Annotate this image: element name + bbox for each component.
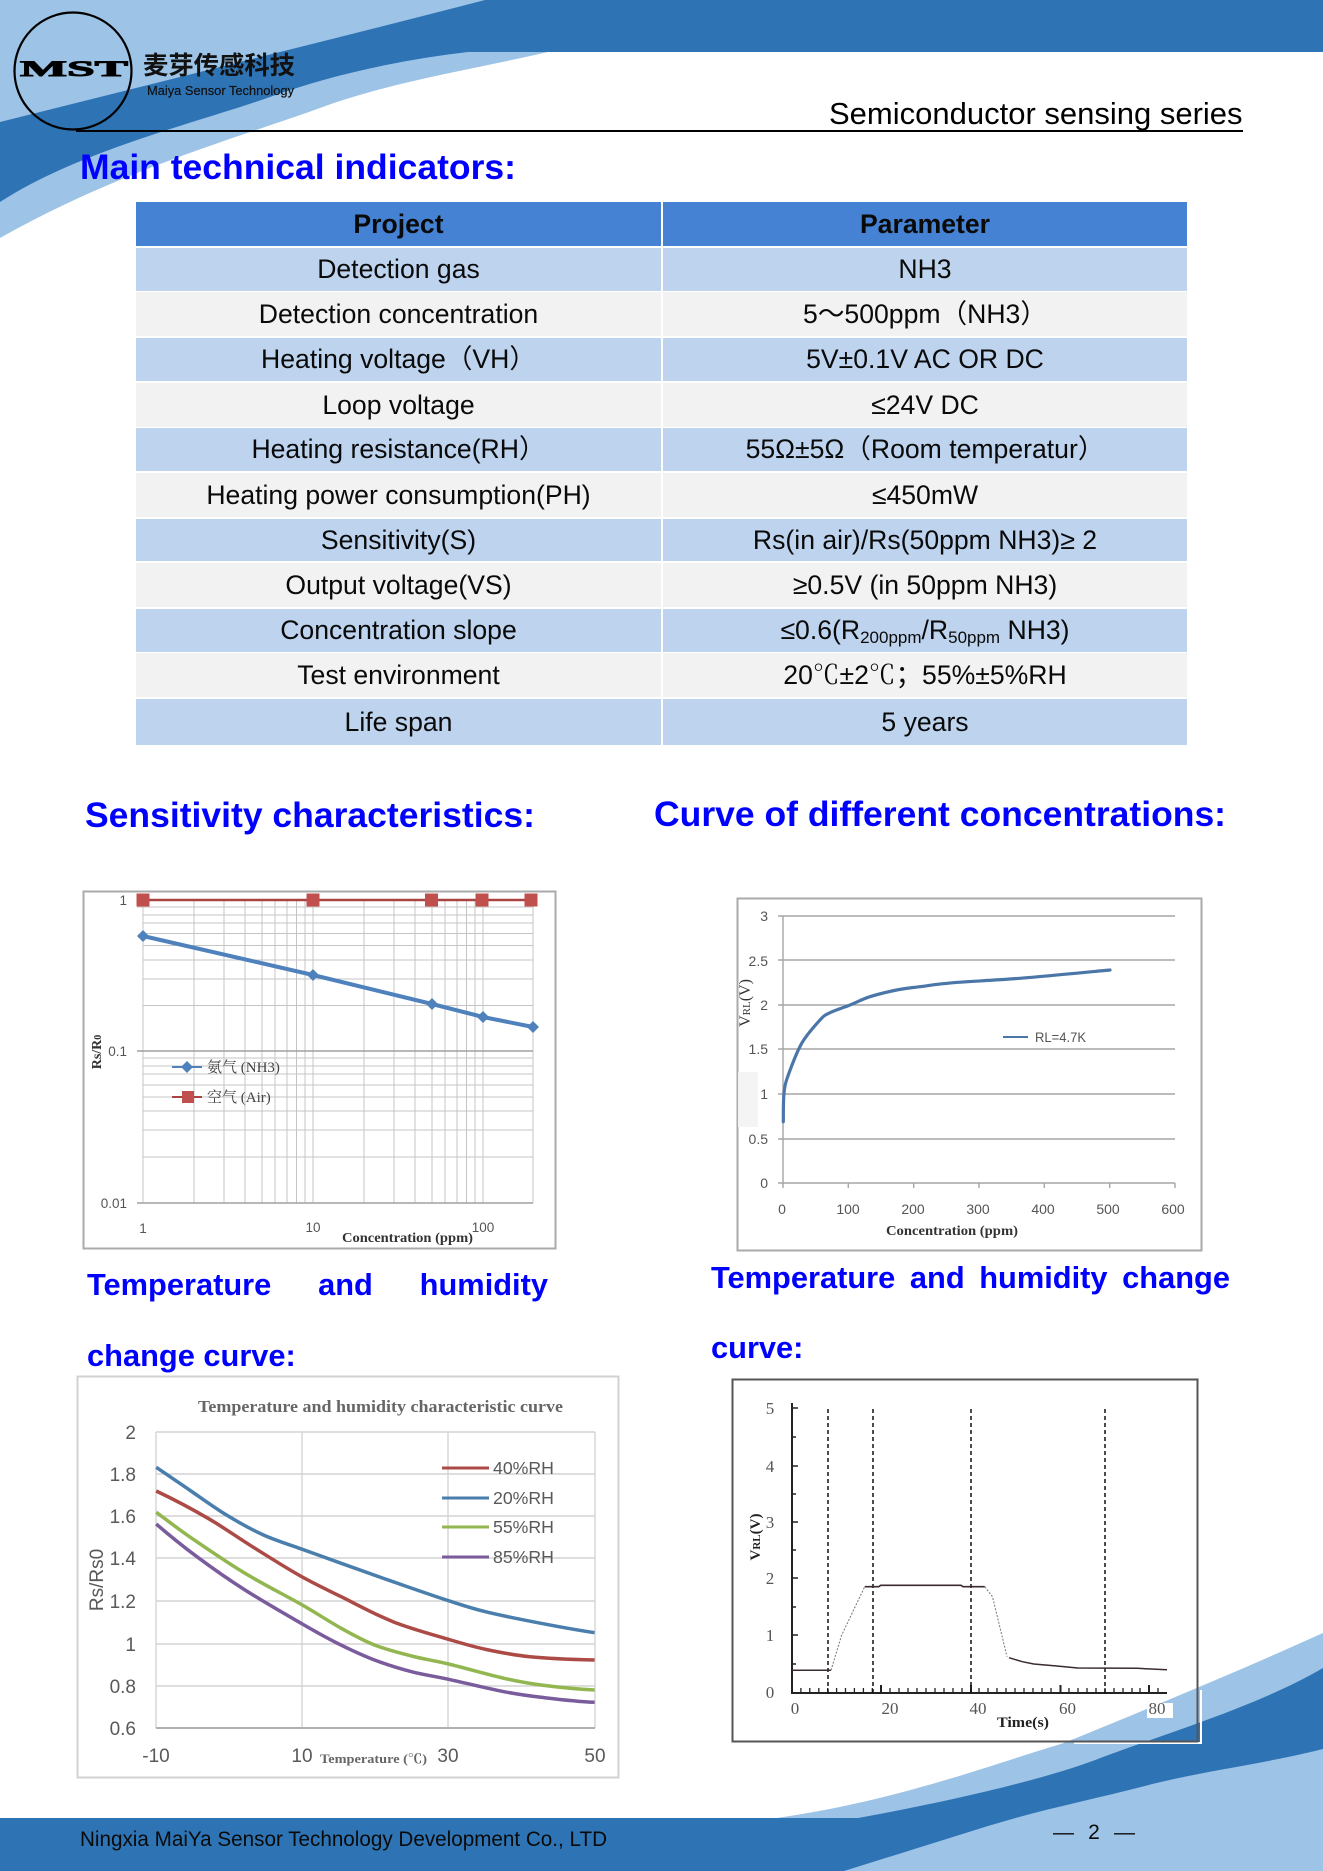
page number: — 2 —: [1053, 1821, 1135, 1844]
x tick labels: 200: [901, 1201, 925, 1217]
y axis title: VRL(V): [737, 979, 754, 1027]
row: detection gas: Detection gas: [317, 254, 480, 284]
y tick labels: [110, 1423, 136, 1740]
y tick labels: 2.5: [749, 953, 768, 969]
heading: temperature and humidity, left: [87, 1267, 548, 1373]
y tick labels: 0.5: [749, 1131, 768, 1147]
y tick labels: 1: [760, 1086, 768, 1102]
x axis title: Temperature (℃): [320, 1751, 427, 1766]
heading line two: curve:: [711, 1330, 803, 1365]
y tick labels: [749, 908, 768, 1191]
x tick labels: 30: [437, 1746, 459, 1767]
footer dark blue wave: [0, 1668, 1323, 1871]
grid and axes: [778, 916, 1175, 1188]
chart: sensitivity characteristics log-log: [82, 890, 556, 1250]
chart frame: [78, 1376, 618, 1778]
header rule: [76, 130, 1243, 132]
y tick labels: 5: [766, 1399, 774, 1418]
dashed time markers: [828, 1409, 1105, 1693]
grid: [156, 1432, 595, 1728]
y tick labels: 1: [766, 1626, 774, 1645]
x tick labels: 0: [791, 1699, 799, 1718]
table header row: Parameter: [860, 209, 990, 239]
x tick labels: -10: [142, 1746, 170, 1767]
legend: 55%RH: [493, 1517, 554, 1537]
axis tick labels: 1: [119, 893, 127, 908]
x tick labels: 80: [1148, 1699, 1166, 1718]
chart title: Temperature and humidity characteristic curve: [198, 1397, 563, 1416]
axis tick labels: 1: [139, 1221, 147, 1236]
y tick labels: 2: [760, 997, 768, 1013]
white patch behind label: [1147, 1703, 1173, 1718]
curve 55%RH: [156, 1512, 595, 1690]
row: sensitivity: [136, 519, 1187, 561]
row: heating voltage: Heating voltage（VH）: [261, 344, 536, 374]
heading: temperature and humidity, right: [711, 1260, 1230, 1365]
curve 20%RH: [156, 1467, 595, 1633]
header series title: Semiconductor sensing series: [829, 96, 1243, 131]
heading line two: change curve:: [87, 1338, 296, 1373]
y tick labels: 0: [766, 1683, 774, 1702]
row: heating power consumption: [136, 473, 1187, 517]
outer white edge: [1074, 1690, 1201, 1743]
axis tick labels: [101, 893, 494, 1236]
x tick labels: 40: [970, 1699, 986, 1718]
heading line one: Temperature and humidity: [87, 1267, 548, 1302]
row: heating voltage: 5V±0.1V AC OR DC: [806, 344, 1044, 374]
axis tick labels: 10: [305, 1220, 321, 1235]
x axis title: Time(s): [997, 1715, 1049, 1731]
y axis title: Rs/R0: [90, 1035, 105, 1069]
RL curve: [783, 970, 1110, 1122]
chart: temperature and humidity characteristic curve: [76, 1376, 620, 1778]
row: heating voltage: [136, 338, 1187, 381]
row: sensitivity: Rs(in air)/Rs(50ppm NH3)≥ 2: [753, 525, 1097, 555]
x tick labels: 20: [882, 1699, 898, 1718]
NH3 series: [137, 930, 539, 1033]
y axis title: Rs/Rs0: [87, 1549, 108, 1611]
y tick labels: 1.4: [110, 1549, 136, 1570]
row: detection gas: NH3: [898, 254, 952, 284]
row: concentration slope: Concentration slope: [280, 615, 517, 645]
row: loop voltage: [136, 383, 1187, 427]
y tick labels: 2: [125, 1423, 136, 1444]
legend: 空气 (Air): [207, 1088, 271, 1106]
x tick labels: 400: [1031, 1201, 1055, 1217]
y tick labels: 2: [766, 1569, 774, 1588]
y tick labels: 0.6: [110, 1719, 136, 1740]
y tick labels: 4: [766, 1457, 775, 1476]
logo Chinese company name: 麦芽传感科技: [143, 46, 295, 82]
heading: curve of different concentrations: Curve of different concentrations:: [654, 794, 1226, 834]
table header row: Project: [353, 209, 444, 239]
x axis title: Concentration (ppm): [342, 1231, 473, 1246]
y axis title: VRL(V): [748, 1514, 764, 1560]
row: sensitivity: Sensitivity(S): [321, 525, 476, 555]
row: life span: 5 years: [881, 707, 969, 737]
row: life span: Life span: [345, 707, 452, 737]
logo letters MST: MST: [20, 56, 129, 81]
row: concentration slope: [136, 609, 1187, 652]
row: test environment: 20℃±2℃；55%±5%RH: [783, 660, 1067, 690]
row: output voltage: Output voltage(VS): [285, 570, 512, 600]
curve 40%RH: [156, 1491, 595, 1660]
x tick labels: 10: [291, 1746, 313, 1767]
y tick labels: 1: [125, 1635, 136, 1656]
row: heating resistance: 55Ω±5Ω（Room temperatur）: [746, 434, 1104, 464]
chart frame: [738, 898, 1202, 1250]
chart: voltage versus concentration: [736, 898, 1202, 1252]
row: detection gas: [136, 248, 1187, 291]
x axis title: Concentration (ppm): [886, 1224, 1018, 1239]
y tick labels: 0.8: [110, 1677, 136, 1698]
x tick labels: 600: [1161, 1201, 1185, 1217]
legend: RL=4.7K: [1035, 1030, 1086, 1045]
x tick labels: 60: [1059, 1699, 1076, 1718]
row: heating resistance: Heating resistance(RH）: [251, 434, 546, 464]
y tick labels: 1.5: [749, 1041, 768, 1057]
response curve: [792, 1585, 1167, 1670]
legend: [1003, 1030, 1086, 1045]
y tick labels: 1.2: [110, 1592, 136, 1613]
x tick labels: 0: [778, 1201, 786, 1217]
axis tick labels: 0.01: [101, 1196, 127, 1211]
legend: 氨气 (NH3): [207, 1059, 280, 1076]
x tick labels: 500: [1096, 1201, 1120, 1217]
header dark blue wave: [0, 0, 1323, 202]
logo ring: [14, 12, 132, 130]
chart frame: [84, 892, 556, 1248]
row: heating power consumption: ≤450mW: [872, 480, 978, 510]
chart frame: [732, 1380, 1198, 1742]
row: loop voltage: Loop voltage: [322, 390, 475, 420]
row: life span: [136, 699, 1187, 745]
row: concentration slope: ≤0.6(R200ppm/R50ppm NH3): [780, 615, 1070, 647]
axis tick labels: 100: [472, 1220, 494, 1235]
legend: 40%RH: [493, 1458, 554, 1478]
row: heating resistance: [136, 428, 1187, 471]
table: technical parameters: [136, 202, 1187, 745]
y tick labels: 1.8: [110, 1465, 136, 1486]
x tick labels: [791, 1699, 1166, 1718]
grey patch: [738, 1072, 758, 1127]
row: output voltage: [136, 563, 1187, 607]
logo: MST circle with company name: [13, 11, 295, 131]
chart: response voltage over time: [732, 1378, 1202, 1744]
y tick labels: 0: [760, 1175, 768, 1191]
row: detection concentration: 5～500ppm（NH3）: [803, 299, 1047, 329]
x tick labels: 300: [966, 1201, 990, 1217]
x tick labels: 50: [584, 1746, 606, 1767]
air series: [136, 894, 538, 906]
row: output voltage: ≥0.5V (in 50ppm NH3): [793, 570, 1057, 600]
axis tick labels: 0.1: [108, 1044, 127, 1059]
row: test environment: [136, 653, 1187, 697]
header light blue wave: [0, 0, 1323, 238]
table header row: [136, 202, 1187, 246]
heading: main technical indicators: Main technical indicators:: [80, 147, 516, 187]
y tick labels: 1.6: [110, 1507, 136, 1528]
heading line one: Temperature and humidity change: [711, 1260, 1230, 1295]
row: heating power consumption: Heating power consumption(PH): [206, 480, 591, 510]
legend: [172, 1059, 280, 1106]
logo English company name: Maiya Sensor Technology: [147, 83, 294, 98]
company name: Ningxia MaiYa Sensor Technology Development Co., LTD: [80, 1828, 607, 1851]
x tick labels: [778, 1201, 1185, 1217]
log grid: [137, 900, 533, 1203]
row: loop voltage: ≤24V DC: [871, 390, 979, 420]
axes and ticks: [792, 1403, 1167, 1693]
x tick labels: [142, 1746, 606, 1767]
y tick labels: [766, 1399, 775, 1702]
curve 85%RH: [156, 1524, 595, 1702]
legend: [442, 1458, 554, 1567]
heading: sensitivity characteristics: Sensitivity characteristics:: [85, 795, 535, 835]
row: detection concentration: Detection concentration: [259, 299, 538, 329]
footer text: company name and page number: [80, 1821, 1135, 1851]
x tick labels: 100: [836, 1201, 860, 1217]
y tick labels: 3: [760, 908, 768, 924]
y tick labels: 3: [766, 1513, 774, 1532]
legend: 20%RH: [493, 1488, 554, 1508]
row: detection concentration: [136, 292, 1187, 336]
footer light blue wave: [0, 1633, 1323, 1871]
legend: 85%RH: [493, 1547, 554, 1567]
row: test environment: Test environment: [297, 660, 500, 690]
